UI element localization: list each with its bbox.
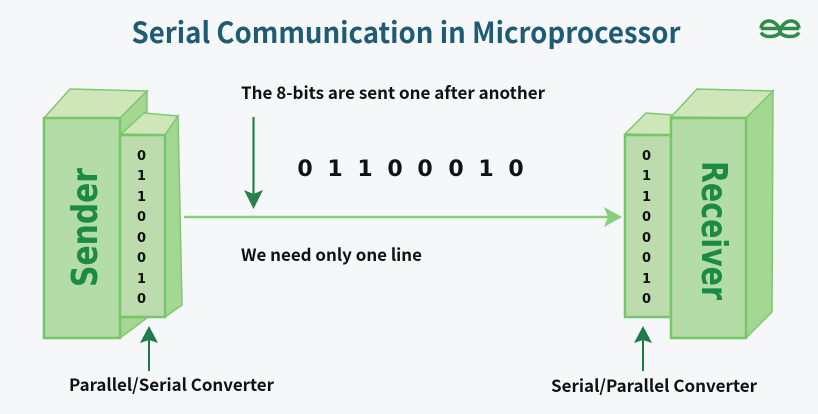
serial/parallel converter block <box>625 113 673 317</box>
bits column right: 0 <box>642 210 651 225</box>
bits column right: 0 <box>642 251 651 266</box>
bits column right: 0 <box>642 231 651 246</box>
bits column right: 0 <box>642 149 651 164</box>
bit sequence: 0 <box>508 157 524 182</box>
sender block <box>44 89 147 338</box>
arrow: right converter <box>634 326 652 371</box>
bits column right: 1 <box>642 272 651 287</box>
caption: 8-bits: The 8-bits are sent one after another <box>241 79 546 104</box>
sender label: Sender <box>65 168 106 287</box>
bits column left: 1 <box>137 169 146 184</box>
arrow: left converter <box>140 326 158 371</box>
bits column right: 1 <box>642 169 651 184</box>
bit sequence <box>297 157 524 182</box>
title: Serial Communication in Microprocessor <box>132 10 681 52</box>
arrow: serial line <box>184 207 622 227</box>
arrow: down <box>244 117 263 209</box>
caption: one line: We need only one line <box>241 241 422 266</box>
bit sequence: 1 <box>327 157 343 182</box>
bits column right: 1 <box>642 190 651 205</box>
bit sequence: 1 <box>357 157 373 182</box>
bit sequence: 0 <box>448 157 464 182</box>
label: serial/parallel converter: Serial/Parallel Converter <box>551 372 758 397</box>
parallel/serial converter block <box>120 113 182 317</box>
bits column left: 0 <box>137 231 146 246</box>
bits column left: 1 <box>137 272 146 287</box>
receiver label: Receiver <box>693 161 734 300</box>
bit sequence: 0 <box>387 157 403 182</box>
icon: logo <box>761 21 799 36</box>
bit sequence: 0 <box>417 157 433 182</box>
bits column left: 1 <box>137 190 146 205</box>
bits column left <box>137 149 146 307</box>
bit sequence: 0 <box>297 157 313 182</box>
bits column left: 0 <box>137 149 146 164</box>
bits column left: 0 <box>137 210 146 225</box>
receiver block <box>671 89 773 338</box>
bit sequence: 1 <box>478 157 494 182</box>
bits column right: 0 <box>642 292 651 307</box>
label: parallel/serial converter: Parallel/Serial Converter <box>69 371 275 396</box>
bits column left: 0 <box>137 251 146 266</box>
bits column left: 0 <box>137 292 146 307</box>
bits column right <box>642 149 651 307</box>
